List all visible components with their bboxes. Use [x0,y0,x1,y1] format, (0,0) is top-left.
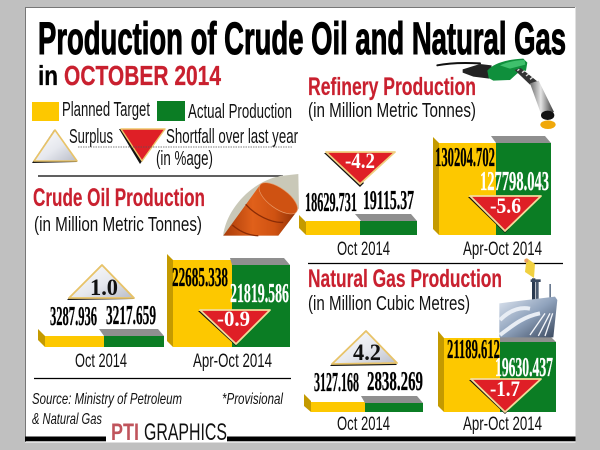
legend: shortfall: (in %age) [156,148,213,170]
heading: crude oil [33,184,205,236]
legend: shortfall: Shortfall over last year [166,126,298,148]
badge: shortfall -5.6: -5.6 [490,193,521,218]
heading: crude oil: (in Million Metric Tonnes) [34,214,202,236]
chart: gas Oct 2014: Oct 2014 [337,414,390,435]
badge: shortfall -1.7: -1.7 [490,376,520,401]
heading: crude oil: Crude Oil Production [33,184,205,212]
chart: refinery Oct 2014: Oct 2014 [337,239,390,260]
source note [32,391,182,428]
logo: PTI Graphics [106,419,227,446]
chart: refinery Oct 2014 [299,148,417,260]
chart: crude Apr-Oct 2014: 22685.338 [172,262,228,292]
legend: planned target [32,99,150,121]
badge: surplus 1.0: 1.0 [90,275,118,300]
chart: crude Oct 2014: Oct 2014 [75,351,127,372]
source note: & Natural Gas [32,411,102,428]
legend: actual production [157,101,292,123]
chart: gas Oct 2014 [304,331,423,435]
provisional note: *Provisional [222,391,283,408]
legend: actual production: Actual Production [188,101,292,123]
chart: gas Apr-Oct 2014: Apr-Oct 2014 [463,414,542,435]
badge: shortfall -0.9: -0.9 [217,306,250,331]
subtitle: OCTOBER 2014 [64,60,221,91]
source note: Source: Ministry of Petroleum [32,391,182,408]
chart: crude Apr-Oct 2014 [167,254,290,372]
chart: refinery Oct 2014: 18629.731 [305,187,357,217]
icon: gas plant [499,258,557,337]
legend: surplus [32,126,113,163]
chart: crude Oct 2014: 3217.659 [106,300,156,330]
heading: refinery: (in Million Metric Tonnes) [308,100,476,122]
chart: refinery Oct 2014: 19115.37 [363,185,414,215]
badge: surplus 4.2: 4.2 [353,340,381,365]
legend: shortfall [119,126,298,170]
chart: gas Oct 2014: 2838.269 [367,366,423,396]
heading: refinery: Refinery Production [308,73,476,101]
chart: crude Apr-Oct 2014: Apr-Oct 2014 [193,351,272,372]
legend [32,99,298,170]
chart: crude Oct 2014: 3287.936 [50,301,97,331]
chart: crude Oct 2014 [38,265,164,372]
subtitle: in [38,60,58,91]
icon: fuel nozzle [437,59,556,129]
panel: crude oil production [33,184,290,372]
logo: PTI Graphics: PTI [111,419,139,446]
logo: PTI Graphics: GRAPHICS [144,419,227,446]
panel: natural gas production [304,265,556,435]
chart: refinery Apr-Oct 2014: Apr-Oct 2014 [463,239,542,260]
subtitle [38,60,221,91]
heading: natural gas: (in Million Cubic Metres) [308,293,470,315]
chart: crude Apr-Oct 2014: 21819.586 [230,278,289,308]
heading: refinery [308,73,476,122]
heading: natural gas [308,265,502,315]
heading: natural gas: Natural Gas Production [308,265,502,293]
legend: surplus: Surplus [69,126,113,148]
chart: refinery Apr-Oct 2014 [433,136,551,260]
legend: planned target: Planned Target [62,99,150,121]
icon: oil barrel [223,174,303,236]
chart: refinery Apr-Oct 2014: 130204.702 [435,142,495,172]
panel: refinery production [299,73,551,260]
chart: gas Apr-Oct 2014: 21189.612 [447,334,500,364]
chart: gas Apr-Oct 2014 [438,331,556,435]
chart: gas Oct 2014: 3127.168 [314,367,359,397]
badge: shortfall -4.2: -4.2 [345,148,375,173]
